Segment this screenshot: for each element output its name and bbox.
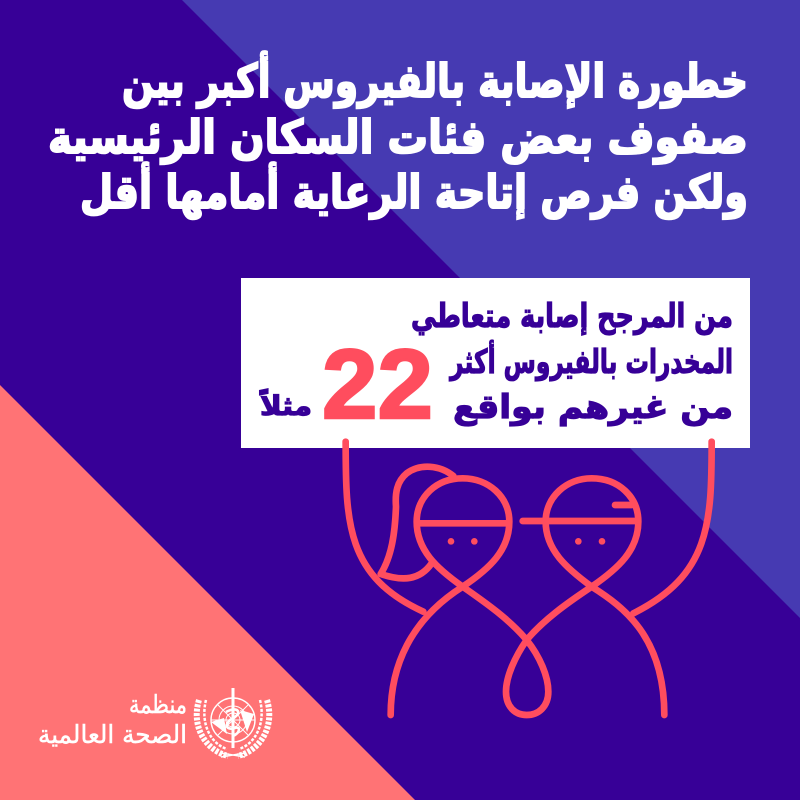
right arm [633, 442, 712, 613]
ponytail [381, 467, 453, 578]
cap [523, 505, 635, 521]
logo text: منظمة [129, 690, 187, 719]
bodies and heads line [391, 478, 664, 715]
icon: WHO emblem [197, 688, 269, 757]
left arm [346, 442, 423, 612]
statistic text: مثلاً [259, 388, 312, 422]
illustration: two people holding sign [346, 442, 712, 715]
hair band [418, 513, 508, 533]
statistic text [259, 296, 733, 427]
logo text [38, 690, 187, 749]
panel: statistic [241, 278, 750, 448]
logo text: الصحة العالمية [38, 720, 187, 749]
statistic text: من غيرهم بواقع [453, 387, 733, 427]
heading [48, 51, 748, 220]
eyes [448, 538, 605, 545]
number 22: 22 [322, 329, 433, 439]
